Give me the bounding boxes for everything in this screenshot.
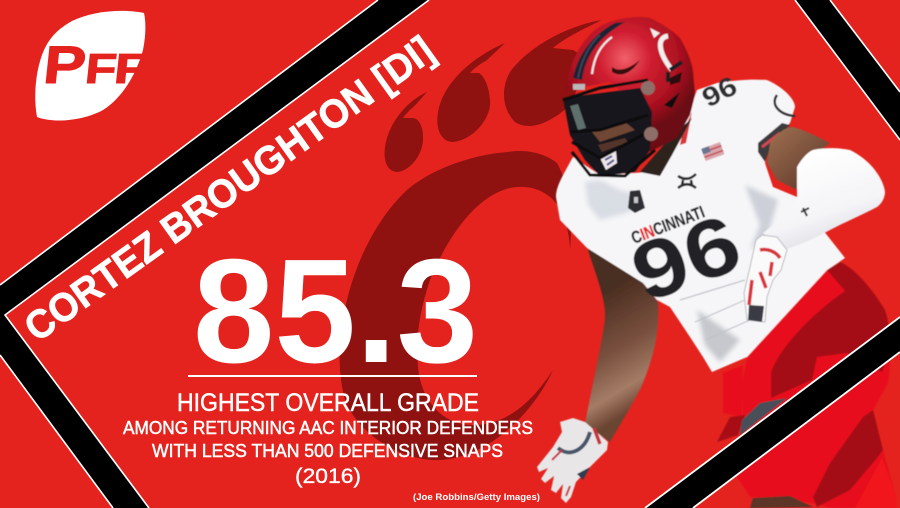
PFF logo (35, 11, 150, 121)
jersey number: 96 (620, 197, 753, 320)
watermark toe left (385, 92, 427, 172)
top-right black stripe (795, 0, 900, 140)
watermark toe middle (437, 43, 505, 142)
face and visor (563, 88, 652, 176)
description line 1: AMONG RETURNING AAC INTERIOR DEFENDERS (123, 417, 533, 438)
description heading: HIGHEST OVERALL GRADE (177, 389, 479, 417)
helmet vents (664, 92, 680, 108)
player left arm (585, 240, 658, 442)
player left glove (537, 418, 608, 503)
logo wordmark (41, 36, 150, 95)
player right glove (744, 235, 787, 322)
description line 2: WITH LESS THAN 500 DEFENSIVE SNAPS (152, 440, 503, 461)
helmet shell (566, 17, 695, 152)
stat description (123, 389, 533, 488)
left chevron black stripe (0, 0, 429, 508)
big grade number: 85.3 (193, 229, 478, 394)
logo wordmark: P (41, 36, 89, 95)
player helmet (563, 17, 695, 176)
arm sleeve (763, 148, 885, 250)
photo credit: (Joe Robbins/Getty Images) (413, 492, 540, 503)
helmet dark stripes (573, 22, 625, 80)
jersey wordmark: CINCINNATI (629, 202, 707, 248)
player jersey (556, 71, 845, 372)
watermark C (340, 151, 571, 460)
mouthguard (600, 151, 617, 170)
jersey shoulder number: 96 (697, 71, 742, 113)
logo wordmark: F (83, 45, 119, 92)
helmet bolts (641, 81, 655, 95)
bottom-right black stripe (645, 317, 900, 508)
title: player name: CORTEZ BROUGHTON [DI] (17, 28, 442, 350)
watermark: bearcat paw C logo (340, 20, 602, 460)
facemask cage (563, 80, 655, 176)
player illustration (537, 17, 897, 508)
jersey flag patch (701, 142, 724, 161)
player pants (717, 262, 897, 508)
description year: (2016) (295, 465, 361, 488)
logo wordmark: F (112, 45, 150, 92)
helmet nike swoosh (612, 60, 640, 74)
player neck (640, 118, 692, 176)
logo football shape (35, 11, 145, 121)
jersey under armour logo (678, 174, 696, 188)
player right arm (763, 127, 885, 250)
watermark toe right (504, 20, 602, 126)
jersey shoulder C logo (775, 95, 795, 116)
helmet C logo (660, 36, 672, 70)
divider rule (188, 375, 477, 377)
jersey conference patch (628, 190, 645, 213)
